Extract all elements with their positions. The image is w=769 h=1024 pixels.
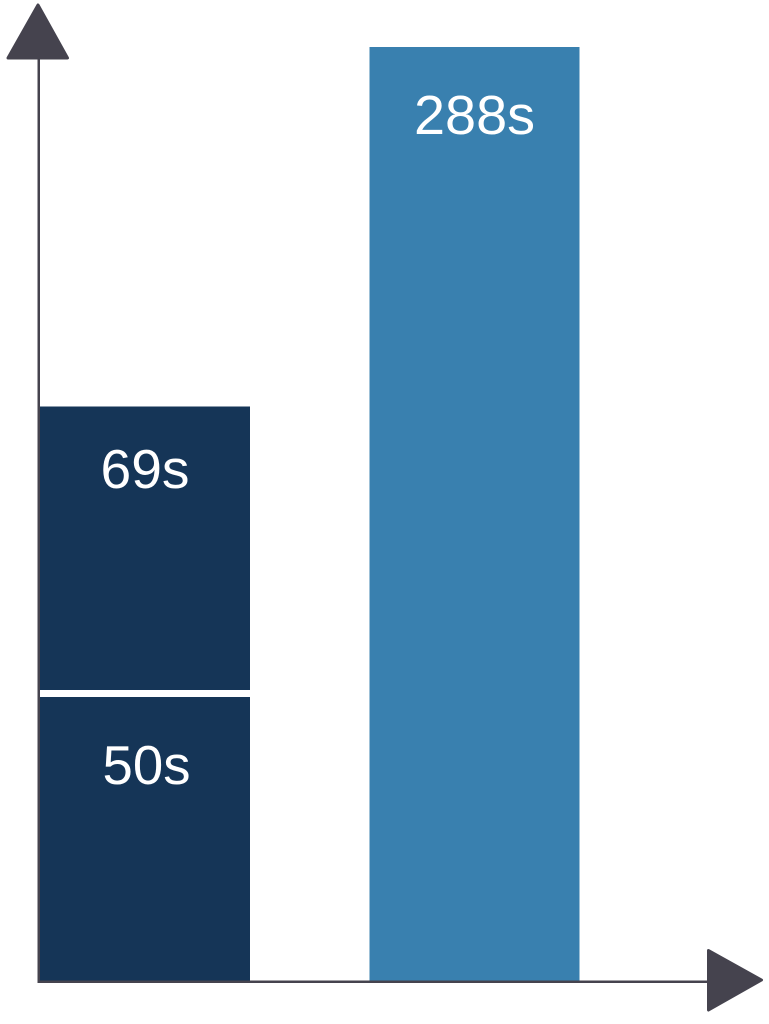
value label: 50s: 50s: [102, 734, 190, 796]
bar: 69s segment: [39, 406, 250, 690]
value label: 288s: 288s: [414, 84, 535, 146]
value label: 69s: 69s: [100, 438, 190, 500]
y axis with arrow: [8, 5, 68, 982]
bar: 288s: [370, 47, 580, 982]
x axis with arrow: [38, 950, 762, 1010]
bar: 50s segment: [39, 697, 250, 982]
